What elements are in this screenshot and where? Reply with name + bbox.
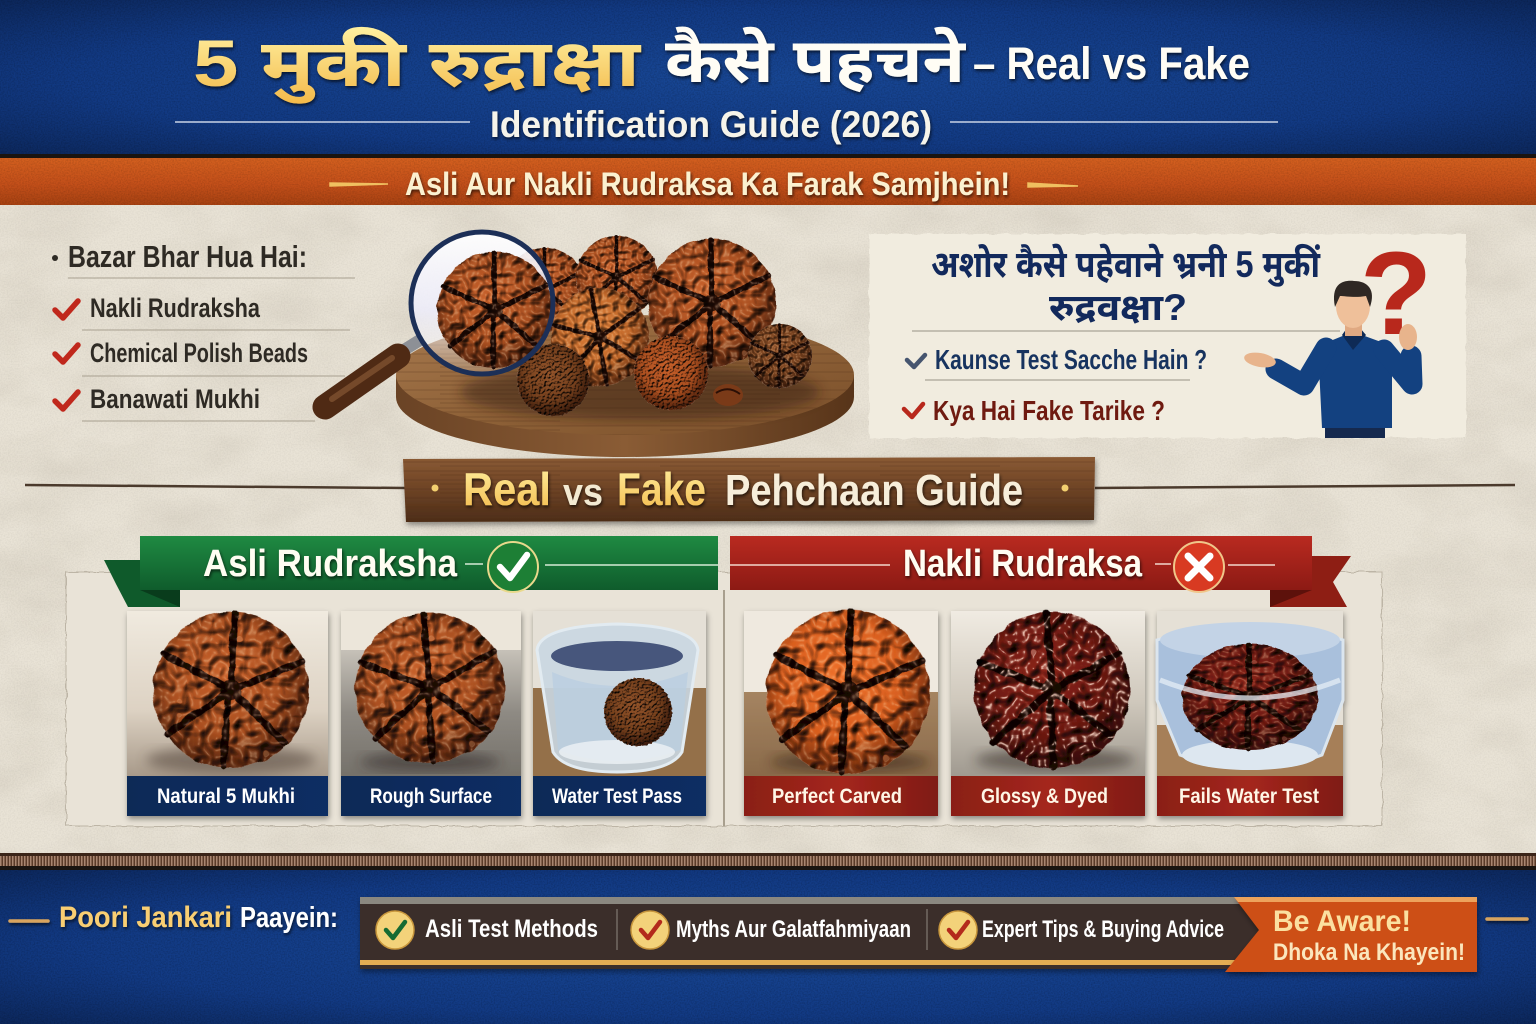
icon: bowl of water: [1157, 622, 1343, 770]
icon: man thinking: [1243, 281, 1417, 438]
question item: tests: Kaunse Test Sacche Hain ?: [935, 344, 1207, 375]
title: कैसे पहचने: [665, 25, 967, 96]
subtitle: Identification Guide (2026): [490, 104, 932, 145]
feature: Myths: Myths Aur Galatfahmiyaan: [676, 916, 911, 943]
card: Rough Surface: Rough Surface: [370, 785, 492, 808]
ribbon: Nakli Rudraksa: Nakli Rudraksa: [903, 543, 1143, 585]
card: Glossy & Dyed: Glossy & Dyed: [981, 785, 1108, 808]
card: Water Test Pass: [533, 611, 706, 816]
card: Water Test Pass: Water Test Pass: [552, 785, 682, 808]
feature: Expert Tips: [939, 911, 1224, 949]
list item: Chemical Polish Beads: [55, 338, 308, 368]
footer lead text: [10, 901, 1527, 934]
card: Perfect Carved: [744, 606, 938, 816]
ribbon: Nakli Rudraksa: [730, 536, 1351, 607]
feature: Myths: [631, 911, 911, 949]
icon: red cross: [1174, 542, 1224, 592]
list item: Nakli Rudraksha: [55, 293, 261, 323]
title: 5 मुकी रुद्राक्षा: [193, 26, 642, 104]
panel: question card: [869, 228, 1466, 438]
feature: Asli Test Methods: Asli Test Methods: [425, 915, 598, 943]
ribbon: Asli Rudraksha: [104, 536, 718, 607]
icon: green check: [488, 542, 538, 592]
wood banner: Real vs Fake guide: Pehchaan Guide: [725, 466, 1023, 515]
illustration: wooden board with beads: [325, 232, 854, 457]
list heading: Bazar Bhar Hua Hai:: [68, 239, 307, 274]
list item: Chemical Polish Beads: Chemical Polish Beads: [90, 338, 308, 368]
icon: magnifying glass: [325, 232, 553, 407]
card: Natural 5 Mukhi: [127, 607, 328, 816]
list item: Nakli Rudraksha: Nakli Rudraksha: [90, 293, 261, 323]
card: Glossy & Dyed: [951, 608, 1145, 816]
footer panel: [0, 853, 1536, 1024]
question item: tests: [907, 344, 1207, 375]
question heading: रुद्रवक्षा?: [1049, 287, 1187, 328]
header panel: [0, 0, 1536, 156]
wood banner: Real vs Fake guide: Fake: [617, 463, 706, 515]
feature: Expert Tips: Expert Tips & Buying Advice: [982, 916, 1224, 943]
card: Natural 5 Mukhi: Natural 5 Mukhi: [157, 785, 295, 808]
card: Rough Surface: [341, 608, 521, 816]
question heading: अशोर कैसे पहेवाने भ्रनी 5 मुकीं: [931, 243, 1321, 287]
background: parchment: [0, 200, 1536, 865]
card: Fails Water Test: [1157, 611, 1343, 816]
title: [193, 25, 1250, 104]
wooden board: [396, 315, 854, 457]
list item: Banawati Mukhi: Banawati Mukhi: [90, 384, 260, 414]
orange band: [0, 154, 1536, 205]
card: Fails Water Test: Fails Water Test: [1179, 785, 1319, 808]
card: Perfect Carved: Perfect Carved: [772, 785, 902, 808]
panel: comparison: [66, 536, 1382, 826]
bead shadows: [460, 364, 820, 420]
title: – Real vs Fake: [973, 38, 1250, 89]
wood banner: Real vs Fake guide: [403, 457, 1095, 522]
question item: fake methods: Kya Hai Fake Tarike ?: [933, 395, 1165, 426]
icon: glass of water: [537, 624, 698, 772]
feature: Asli Test Methods: [376, 911, 598, 949]
callout: Be Aware: Dhoka Na Khayein!: [1273, 939, 1465, 966]
left list panel: [52, 239, 355, 421]
footer lead text: Poori Jankari: [59, 901, 232, 934]
callout: Be Aware: Be Aware!: [1273, 905, 1411, 938]
orange band: Asli Aur Nakli Rudraksa Ka Farak Samjhein!: [405, 166, 1010, 202]
wood banner: Real vs Fake guide: vs: [563, 472, 603, 514]
ribbon: Asli Rudraksha: Asli Rudraksha: [203, 543, 458, 585]
section divider lines: [25, 485, 1515, 488]
question heading: [931, 243, 1321, 328]
wood banner: Real vs Fake guide: Real: [463, 463, 551, 515]
beads group: [503, 236, 812, 416]
callout: Be Aware: [1225, 897, 1477, 972]
icon: question mark: ?: [1360, 228, 1432, 360]
footer lead text: Paayein:: [240, 902, 338, 934]
footer bar: [360, 897, 1265, 969]
